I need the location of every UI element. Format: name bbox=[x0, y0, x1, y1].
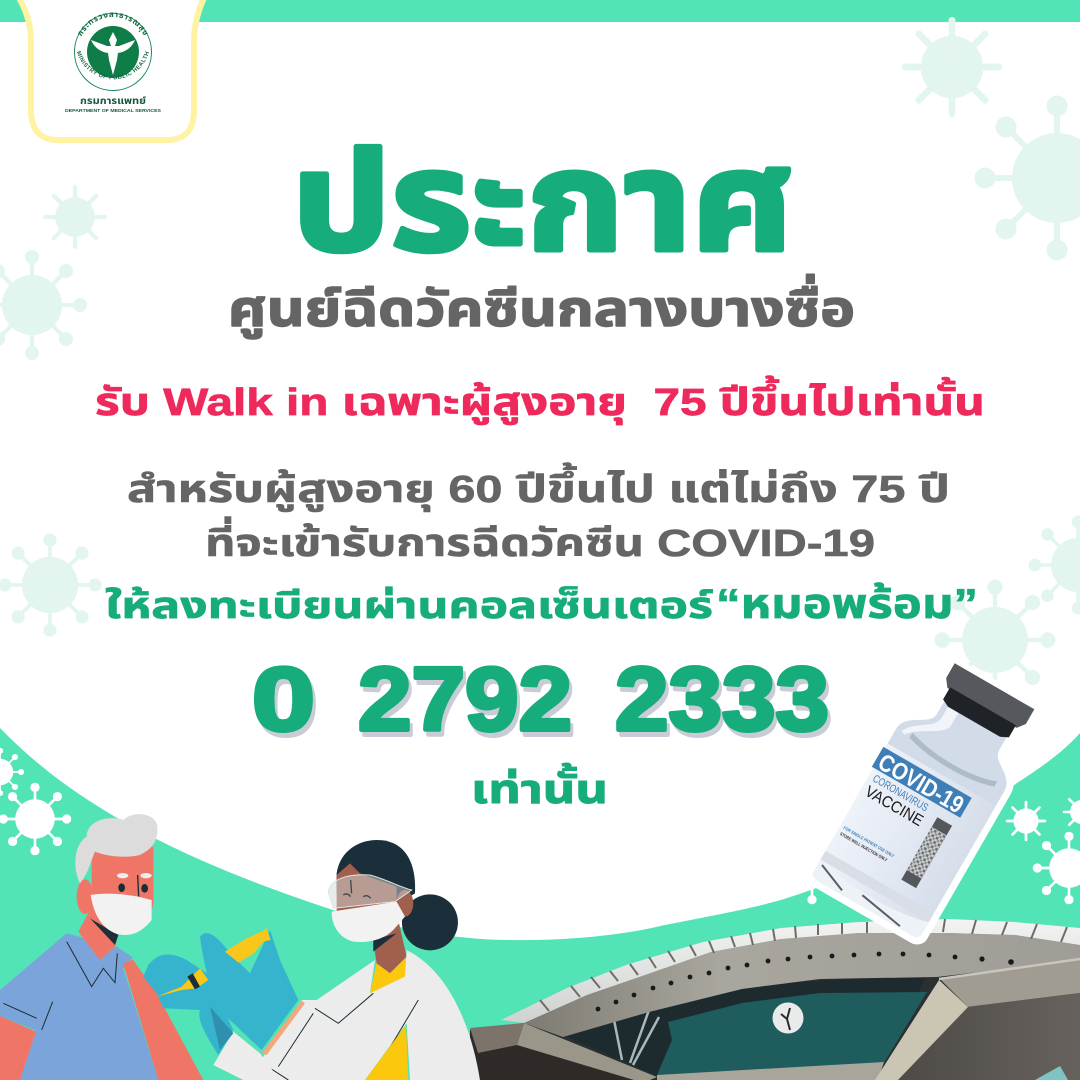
yellow shirt lower bbox=[365, 1025, 408, 1080]
caduceus emblem bbox=[91, 32, 135, 75]
teal window glimpse bbox=[1035, 1066, 1068, 1080]
ministry seal bbox=[74, 12, 152, 91]
register via call centre: “หมอพร้อม” bbox=[716, 580, 978, 627]
nurse eyes bbox=[343, 880, 371, 898]
coat cuff left bbox=[213, 1032, 280, 1080]
ministry seal: กระทรวงสาธารณสุข bbox=[78, 12, 148, 36]
tile separators bbox=[540, 919, 1067, 1011]
phone number: 0 bbox=[255, 655, 318, 755]
sleeve fold bbox=[3, 1002, 53, 1030]
glove right hand bbox=[200, 930, 298, 1050]
shirt bbox=[0, 933, 158, 1080]
glass neck and shoulder bbox=[855, 686, 1029, 863]
steel band bbox=[524, 933, 1080, 1037]
label text: COVID-19 bbox=[873, 749, 968, 819]
lower body grey shade bbox=[821, 851, 934, 922]
illustration: nurse giving vaccine bbox=[143, 840, 480, 1080]
vaccine vial: CORONAVIRUS bbox=[870, 773, 930, 814]
ear bbox=[77, 879, 93, 914]
title: ประกาศ bbox=[292, 125, 794, 280]
phone number: 2333 bbox=[618, 655, 832, 755]
clock bbox=[772, 1002, 804, 1034]
department name: กรมการแพทย์ bbox=[80, 96, 146, 107]
top green bar bbox=[0, 0, 1080, 22]
QR code strip bbox=[901, 817, 952, 888]
aluminium cap bbox=[942, 663, 1034, 731]
blue label band bbox=[872, 747, 972, 818]
vaccine vial: FOR SINGLE PATIENT USE ONLY bbox=[843, 825, 895, 858]
walk-in notice: รับ Walk in เฉพาะผู้สูงอายุ 75 ปีขึ้นไปเท่านั้น bbox=[95, 375, 985, 425]
beige column bbox=[875, 980, 968, 1080]
lower left panels bbox=[472, 1024, 660, 1080]
logo panel bbox=[16, 0, 206, 143]
bottom metal strip bbox=[657, 1062, 884, 1080]
only: เท่านั้น bbox=[471, 762, 608, 812]
glass highlights bbox=[901, 691, 959, 753]
neck bbox=[373, 920, 407, 973]
coat lapel lines bbox=[260, 993, 418, 1080]
glass body bbox=[811, 743, 996, 939]
bottom glass shading bbox=[811, 860, 929, 939]
pale virus decorations bbox=[0, 20, 1080, 698]
head bbox=[92, 847, 153, 923]
ministry seal: MINISTRY OF PUBLIC HEALTH bbox=[76, 50, 149, 80]
collar bbox=[67, 942, 117, 987]
hair bbox=[75, 814, 157, 883]
goggles bbox=[328, 875, 412, 908]
glove left hand bbox=[143, 955, 233, 1055]
roof tile strip bbox=[501, 919, 1080, 1023]
logo panel: DEPARTMENT OF MEDICAL SERVICES bbox=[65, 108, 161, 113]
white sticker outline bbox=[802, 646, 1056, 949]
lab coat bbox=[260, 950, 480, 1080]
yellow shirt bbox=[370, 957, 407, 993]
glass facade bbox=[657, 992, 927, 1075]
struts bbox=[614, 1010, 659, 1065]
ear bbox=[397, 890, 413, 917]
white viruses on green bbox=[0, 749, 1080, 903]
cuff stripe bbox=[262, 1001, 305, 1055]
eyebrows and eyes bbox=[117, 873, 128, 878]
syringe bbox=[157, 968, 208, 997]
head hair bbox=[337, 840, 415, 907]
phone number: 0 bbox=[252, 650, 315, 750]
arms bbox=[0, 1016, 36, 1080]
vaccine vial bbox=[802, 646, 1056, 949]
building: Bang Sue Grand Station bbox=[470, 919, 1080, 1080]
hair bun bbox=[402, 894, 458, 950]
building base fill bbox=[470, 933, 1080, 1080]
phone number: 2792 bbox=[361, 655, 575, 755]
dark void behind glass with struts bbox=[563, 975, 927, 1076]
eligibility line 2: ที่จะเข้ารับการฉีดวัคซีน COVID-19 bbox=[205, 516, 875, 565]
dots bbox=[596, 952, 1014, 1011]
phone number: 2333 bbox=[615, 650, 829, 750]
phone number bbox=[252, 650, 832, 755]
subtitle: ศูนย์ฉีดวัคซีนกลางบางซื่อ bbox=[228, 274, 855, 339]
eligibility line 1: สำหรับผู้สูงอายุ 60 ปีขึ้นไป แต่ไม่ถึง 75 ปี bbox=[127, 462, 950, 512]
diagonal beam bbox=[517, 1023, 657, 1080]
green wave background bbox=[0, 728, 1080, 1080]
register via call centre bbox=[105, 580, 978, 627]
vaccine vial: STORE WELL INJECTION ONLY bbox=[839, 831, 888, 863]
phone number: 2792 bbox=[358, 650, 572, 750]
illustration: elderly man receiving vaccine bbox=[0, 814, 203, 1080]
face bbox=[337, 863, 397, 940]
register via call centre: ให้ลงทะเบียนผ่านคอลเซ็นเตอร์ bbox=[105, 585, 714, 626]
neck bbox=[78, 907, 120, 960]
steel facade right bbox=[939, 960, 1080, 1007]
vaccine vial: VACCINE bbox=[862, 783, 926, 830]
mask bbox=[91, 894, 152, 935]
glove shadow bbox=[210, 1007, 233, 1050]
mask bbox=[332, 902, 405, 942]
